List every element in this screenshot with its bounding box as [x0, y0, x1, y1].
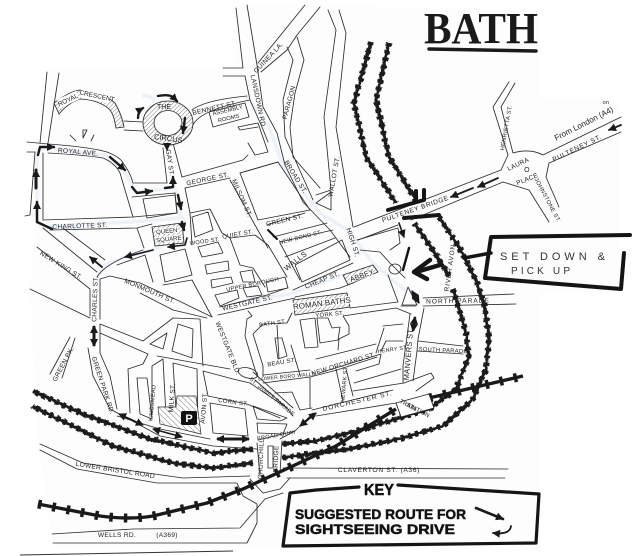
landmark: Assembly Rooms: ASSEMBLY	[212, 105, 244, 117]
street name labels: CORN ST.	[218, 398, 249, 408]
landmark: train station	[396, 394, 434, 419]
landmark: The Circus: CIRCUS	[153, 132, 183, 145]
street name labels: WALLOT ST.	[328, 156, 342, 198]
street name labels: BEAU ST.	[267, 358, 297, 368]
landmark: Queen Square	[152, 223, 184, 246]
street name labels: WELLS RD.	[98, 532, 136, 539]
river Avon, lower channel	[32, 217, 489, 468]
street name labels: HENRIETTA ST.	[500, 105, 514, 151]
street name labels: GREEN PARK RD.	[90, 356, 115, 415]
landmark: Roman Baths: ROMAN BATHS	[293, 295, 351, 312]
street name labels: CHURCHILL	[257, 439, 266, 479]
street name labels: CHEAP ST.	[304, 270, 341, 291]
street name labels: WESTGATE BLD.	[213, 321, 241, 376]
street name labels: MILK ST.	[168, 383, 177, 413]
landmark: The Circus: THE	[157, 104, 171, 111]
street name labels: WESTGATE ST.	[222, 294, 274, 313]
street name labels: UPPER BOROUGH	[226, 277, 280, 294]
callout: set down and pick up	[414, 235, 630, 289]
railway line	[38, 376, 523, 518]
callout: set down and pick up: PICK UP	[511, 266, 570, 277]
street name labels: PARAGON	[282, 85, 297, 120]
street name labels: QUIET ST.	[222, 229, 254, 241]
street name labels: NORTH PARADE	[426, 297, 490, 306]
street name labels: GREEN ST.	[266, 213, 304, 228]
icon: turning arrow	[493, 526, 511, 533]
street name labels: BROAD ST.	[282, 159, 308, 195]
car park with P sign	[158, 396, 201, 434]
street name labels: CHARLOTTE ST.	[52, 222, 108, 231]
landmark: Assembly Rooms	[209, 103, 249, 127]
street name labels: BRIDGE	[273, 445, 280, 473]
street name labels: From London (A4)	[553, 105, 615, 143]
street name labels: BATH ST.	[259, 319, 287, 329]
street name labels: MILSOM ST.	[230, 179, 253, 218]
street name labels: MANVERS ST.	[402, 327, 415, 381]
street name labels: GEORGE ST.	[186, 172, 230, 187]
key panel: SUGGESTED ROUTE FOR	[295, 506, 466, 522]
street name labels: AVON ST.	[200, 392, 209, 424]
key panel: SIGHTSEEING DRIVE	[295, 521, 455, 537]
landmark: Royal Crescent: ROYAL	[57, 93, 80, 108]
street name labels: (A369)	[156, 532, 178, 539]
street name labels: GAY ST.	[164, 149, 175, 177]
street name labels: PULTENEY BRIDGE	[381, 195, 450, 224]
street name labels: YORK ST.	[315, 311, 345, 319]
river Avon, upper channel	[354, 42, 416, 203]
title: BATH	[424, 4, 538, 53]
street name labels: PULTENEY ST.	[552, 134, 603, 164]
landmark: Assembly Rooms: ROOMS	[217, 114, 240, 124]
street name labels: GREEN PK.	[52, 346, 76, 383]
pale blue route highlight	[37, 96, 405, 300]
landmark: Queen Square: QUEEN	[156, 228, 178, 236]
landmark: Queen Square: SQUARE	[156, 236, 182, 244]
street name labels: NEW ORCHARD ST.	[311, 352, 376, 378]
street name labels: LAURA	[506, 156, 531, 173]
street name labels: LOWER BORO WALLS	[258, 371, 316, 382]
street name labels: NEW BOND ST.	[279, 230, 323, 246]
street name labels: NEW KING ST.	[38, 250, 83, 281]
street name labels: RIVER AVON	[444, 244, 457, 292]
street name labels: JOHNSTONE ST.	[533, 177, 561, 224]
street name labels: KINGSMEAD	[148, 385, 158, 421]
street name labels: PLACE	[516, 172, 540, 187]
street name labels: LANSDOWN RD	[249, 74, 266, 127]
street name labels: ST. JAMES PARADE	[248, 377, 295, 418]
street name labels: NEWARK ST.	[340, 365, 350, 403]
street name labels: GUINEA LA.	[253, 41, 285, 75]
landmark: Abbey: ABBEY	[349, 267, 375, 284]
street name labels: O	[524, 167, 530, 174]
landmark: Royal Crescent: CRESCENT	[79, 89, 115, 104]
street name labels: WOOD ST.	[190, 237, 220, 247]
street name labels: BROAD QUAY	[257, 430, 297, 442]
key panel	[283, 482, 539, 546]
landmark: The Circus	[143, 101, 193, 145]
street name labels: WALLS	[282, 249, 309, 273]
street name labels: DORCHESTER ST.	[322, 390, 393, 413]
car park with P sign: P	[185, 413, 193, 425]
callout: set down and pick up: SET DOWN &	[500, 251, 606, 263]
street name labels: HENRY ST.	[377, 345, 408, 355]
street name labels: HIGH ST.	[344, 227, 360, 258]
street name labels: CHARLES ST.	[91, 276, 100, 322]
key panel: KEY	[364, 482, 394, 499]
street name labels: CLAVERTON ST. (A36)	[338, 467, 420, 474]
suggested route arrows	[36, 95, 621, 439]
street name labels: MONMOUTH ST.	[123, 278, 176, 305]
arrow: pointer to set-down point	[414, 260, 440, 279]
landmark: train station: STATION	[405, 402, 430, 419]
street name labels: LOWER BRISTOL ROAD	[75, 461, 155, 480]
street name labels: BENNETT ST.	[192, 100, 238, 117]
Pulteney Bridge	[388, 190, 439, 218]
street name labels: SOUTH PARADE	[418, 347, 468, 355]
landmark: Abbey	[343, 265, 378, 285]
scan edge line	[20, 551, 233, 555]
street name labels: on	[603, 100, 609, 106]
icon: route direction arrow	[476, 508, 503, 519]
street name labels: ROYAL AVE.	[58, 147, 99, 158]
landmark: train station: TRAIN	[398, 399, 417, 413]
landmark: Royal Crescent	[54, 89, 124, 128]
